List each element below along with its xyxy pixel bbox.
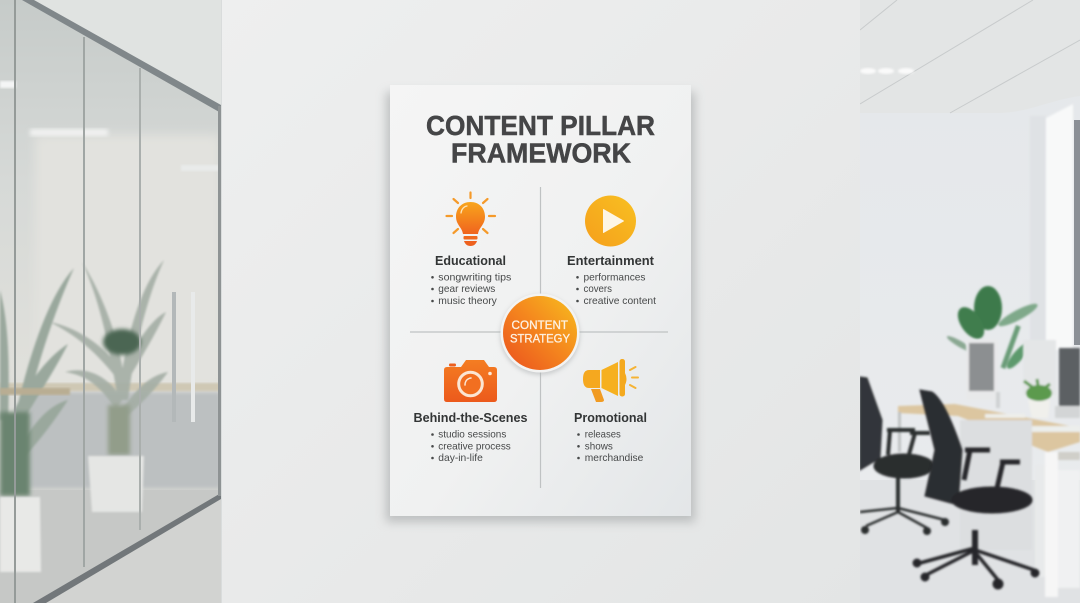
- palm plant behind glass: [50, 260, 168, 415]
- list: behind-the-scenes topics: studio sessions: [438, 430, 506, 440]
- center badge: content strategy: STRATEGY: [510, 334, 570, 346]
- list: educational topics: songwriting tips: [438, 272, 511, 284]
- list: entertainment topics: [576, 272, 656, 307]
- near palm: [0, 268, 74, 455]
- quadrant dividers: [410, 187, 668, 488]
- wall: [221, 0, 860, 603]
- left wall edge: [221, 0, 222, 603]
- list: entertainment topics: performances: [584, 272, 646, 284]
- panel: entertainment: [567, 196, 656, 307]
- left scene: glass partition office: [0, 0, 221, 603]
- title: FRAMEWORK: [451, 138, 631, 168]
- list: behind-the-scenes topics: creative process: [438, 442, 511, 452]
- heading: entertainment: Entertainment: [567, 253, 655, 268]
- list: promotional topics: [577, 430, 644, 464]
- chair back: [860, 377, 948, 534]
- plant: [946, 286, 1040, 371]
- heading: educational: Educational: [435, 253, 506, 268]
- list: promotional topics: releases: [585, 430, 621, 440]
- list: behind-the-scenes topics: day-in-life: [438, 453, 483, 464]
- icon: light bulb: [446, 192, 495, 246]
- list: behind-the-scenes topics: [431, 430, 511, 464]
- title: [426, 110, 655, 168]
- icon: megaphone: [583, 359, 638, 402]
- poster: [390, 85, 691, 516]
- right scene: open office with desk and chairs: [860, 0, 1080, 603]
- icon: play button: [585, 196, 636, 246]
- list: entertainment topics: creative content: [584, 296, 656, 307]
- list: educational topics: [431, 272, 511, 307]
- list: promotional topics: merchandise: [585, 453, 644, 464]
- list: educational topics: gear reviews: [438, 284, 495, 295]
- monitors: [966, 340, 1080, 418]
- center badge: content strategy: CONTENT: [512, 320, 568, 332]
- panel: educational: [431, 192, 511, 307]
- poster shadow: [386, 92, 695, 522]
- list: educational topics: music theory: [438, 296, 498, 307]
- icon: camera: [444, 360, 497, 402]
- desk: [898, 404, 1080, 597]
- center badge: content strategy: [500, 294, 580, 375]
- chair front: [913, 390, 1039, 589]
- panel: behind-the-scenes: [414, 360, 528, 464]
- heading: behind-the-scenes: Behind-the-Scenes: [414, 410, 528, 425]
- heading: promotional: Promotional: [574, 410, 647, 425]
- list: promotional topics: shows: [585, 442, 613, 452]
- panel: promotional: [574, 359, 647, 464]
- title: CONTENT PILLAR: [426, 110, 655, 141]
- poster board: [390, 85, 691, 516]
- list: entertainment topics: covers: [584, 284, 612, 295]
